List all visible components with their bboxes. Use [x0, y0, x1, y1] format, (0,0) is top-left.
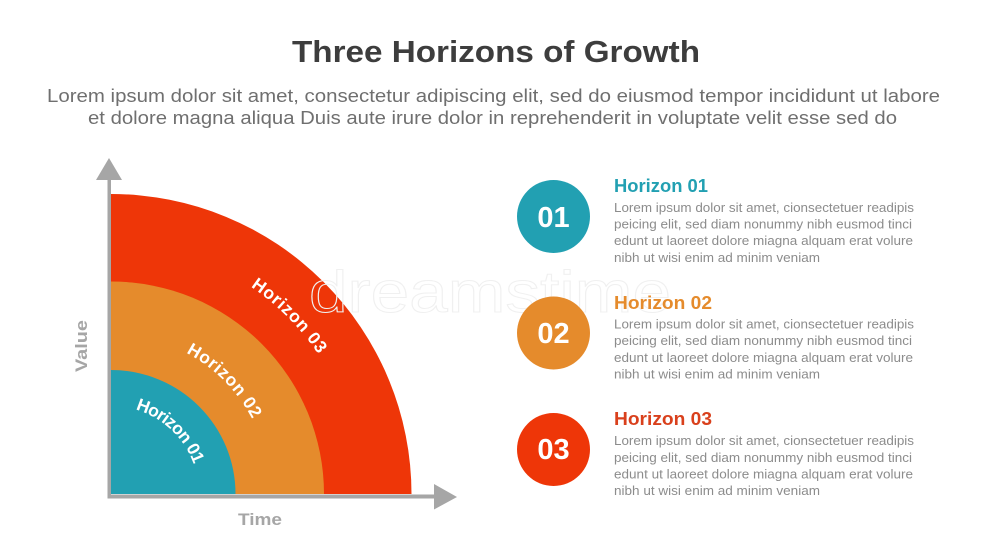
text 02 [614, 316, 915, 382]
subtitle: et dolore magna aliqua Duis aute irure dolor in reprehenderit in voluptate velit esse sed do [88, 108, 897, 128]
text 03: nibh ut wisi enim ad minim veniam [614, 483, 820, 498]
band: horizon 01 [111, 370, 236, 494]
value axis arrow [96, 158, 122, 498]
heading 03: Horizon 03 [614, 409, 712, 429]
subtitle [47, 86, 940, 128]
text 01 [614, 200, 915, 265]
quarter-circle horizon chart [111, 194, 412, 494]
band: horizon 02 [111, 282, 324, 494]
text 02: Lorem ipsum dolor sit amet, cionsectetuer readipis [614, 316, 915, 332]
number badge 03: 03 [537, 434, 570, 466]
text 02: nibh ut wisi enim ad minim veniam [614, 366, 820, 382]
title: Three Horizons of Growth [292, 34, 700, 69]
text 02: edunt ut laoreet dolore miagna alquam erat volure [614, 350, 913, 365]
label: horizon 03: Horizon 03 [252, 278, 326, 352]
text 03: peicing elit, sed diam nonummy nibh eusmod tinci [614, 450, 912, 465]
label: horizon 01: Horizon 01 [136, 398, 204, 464]
item: horizon 01 [517, 176, 915, 265]
number badge 02 [517, 296, 590, 370]
text 03: Lorem ipsum dolor sit amet, cionsectetuer readipis [614, 433, 915, 448]
band: horizon 03 [111, 194, 412, 494]
number badge 02: 02 [537, 318, 570, 350]
axis label: value: Value [72, 320, 91, 372]
number badge 01: 01 [537, 202, 570, 234]
heading 01: Horizon 01 [614, 176, 708, 196]
item: horizon 03 [517, 409, 915, 498]
subtitle: Lorem ipsum dolor sit amet, consectetur adipiscing elit, sed do eiusmod tempor incididunt ut labore [47, 86, 940, 106]
axis label: time: Time [238, 510, 282, 529]
number badge 01 [517, 180, 590, 253]
text 03: edunt ut laoreet dolore miagna alquam erat volure [614, 466, 913, 482]
time axis arrow [108, 484, 457, 510]
heading 02: Horizon 02 [614, 293, 712, 313]
text 01: Lorem ipsum dolor sit amet, cionsectetuer readipis [614, 200, 915, 215]
item: horizon 02 [517, 293, 915, 382]
label: horizon 02: Horizon 02 [187, 342, 262, 418]
text 01: peicing elit, sed diam nonummy nibh eusmod tinci [614, 216, 912, 232]
text 01: nibh ut wisi enim ad minim veniam [614, 250, 820, 265]
text 02: peicing elit, sed diam nonummy nibh eusmod tinci [614, 333, 912, 348]
number badge 03 [517, 413, 590, 486]
watermark: dreamstime [309, 260, 671, 325]
text 03 [614, 433, 915, 498]
text 01: edunt ut laoreet dolore miagna alquam erat volure [614, 233, 913, 248]
